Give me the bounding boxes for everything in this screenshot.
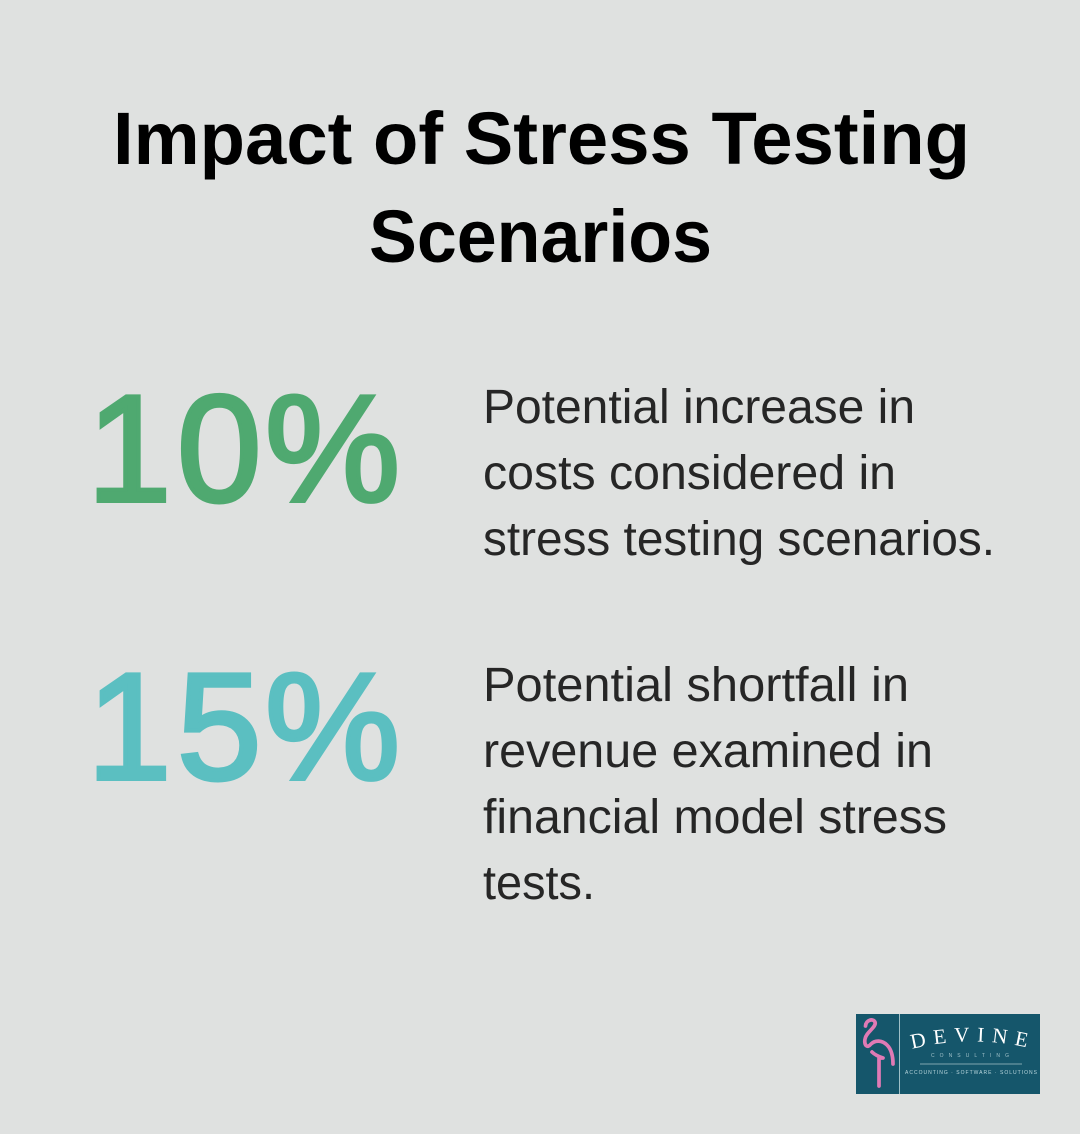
title [113, 97, 970, 278]
stat: 15%: 15% [87, 642, 400, 812]
description: 15% stat: financial model stress [483, 791, 947, 844]
description: 10% stat: stress testing scenarios. [483, 513, 995, 566]
description: 15% stat [483, 659, 947, 910]
description: 10% stat: Potential increase in [483, 381, 915, 434]
description: 10% stat [483, 381, 995, 566]
logo wordmark [912, 1042, 1034, 1049]
logo tagline: ACCOUNTING · SOFTWARE · SOLUTIONS [905, 1070, 1038, 1076]
description: 15% stat: revenue examined in [483, 725, 933, 778]
stat: 10%: 10% [87, 364, 400, 534]
description: 10% stat: costs considered in [483, 447, 896, 500]
logo: Devine Consulting: DEVINE [910, 1028, 1028, 1049]
description: 15% stat: tests. [483, 857, 595, 910]
title: Scenarios [369, 195, 712, 278]
title: Impact of Stress Testing [113, 97, 970, 180]
logo subtitle: CONSULTING [931, 1053, 1009, 1059]
description: 15% stat: Potential shortfall in [483, 659, 909, 712]
icon: flamingo [865, 1020, 893, 1086]
logo: Devine Consulting [856, 1014, 1040, 1094]
